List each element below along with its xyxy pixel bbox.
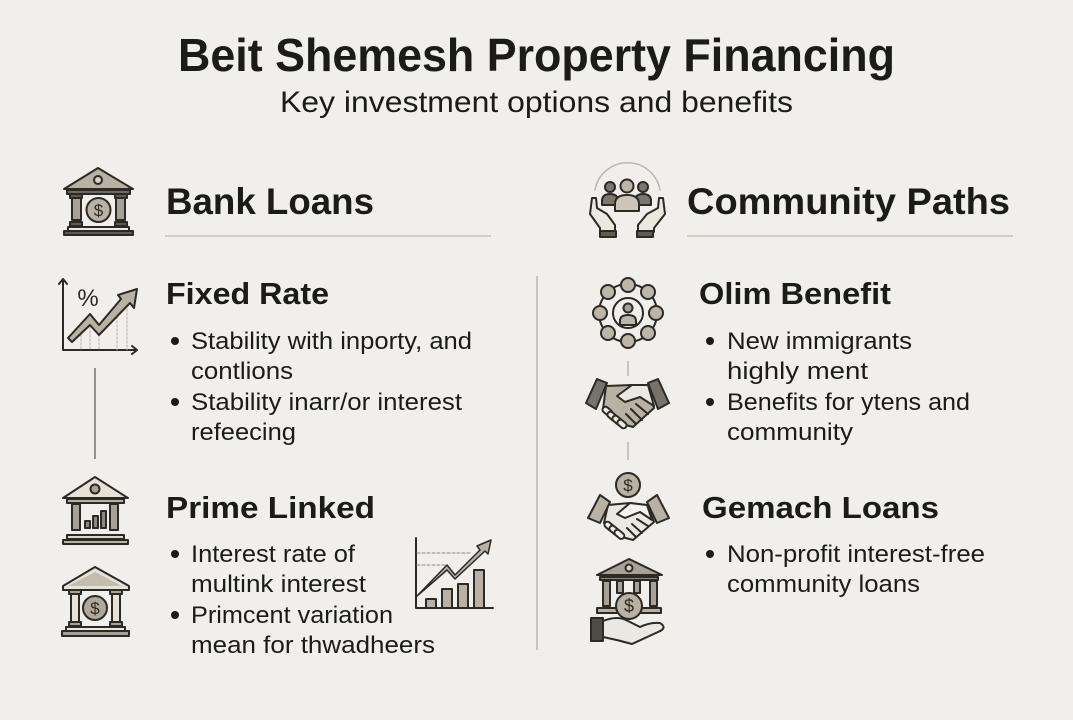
bullet list: Gemach Loans — [706, 541, 985, 598]
icon: bank with dollar coin — [64, 168, 133, 235]
heading: Community Paths: Community Paths — [687, 181, 1010, 222]
section: Prime Linked — [166, 490, 435, 659]
bullet list: Fixed Rate: Stability with inporty, and — [191, 328, 472, 355]
icon: percent growth chart: % — [77, 285, 99, 312]
bullet list: Olim Benefit: New immigrants — [727, 328, 912, 355]
bullet list: Olim Benefit: Benefits for ytens and — [727, 389, 970, 416]
bullet list: Olim Benefit — [706, 328, 970, 446]
bullet list: Prime Linked: Primcent variation — [191, 602, 393, 629]
icon: community hands — [590, 163, 665, 237]
subtitle: Key investment options and benefits — [280, 86, 793, 119]
icon: bank with coin, light — [62, 567, 129, 636]
icon: bank with coin over open hand: $ — [624, 596, 634, 616]
bullet list: Fixed Rate — [171, 328, 472, 446]
icon: percent growth chart — [59, 279, 137, 354]
chart: rising bars with arrow — [416, 538, 493, 608]
bullet list: Olim Benefit: highly ment — [727, 358, 868, 385]
heading: Gemach Loans: Gemach Loans — [702, 490, 939, 525]
title: Beit Shemesh Property Financing — [178, 29, 895, 81]
section: Olim Benefit — [699, 276, 970, 446]
bullet list: Fixed Rate: contlions — [191, 358, 293, 385]
bullet list: Fixed Rate: Stability inarr/or interest — [191, 389, 462, 416]
icon: network circle of people — [593, 278, 663, 348]
section: Gemach Loans — [702, 490, 985, 598]
bullet list: Prime Linked — [171, 541, 435, 659]
bullet list: Olim Benefit: community — [727, 419, 853, 446]
icon: bank with bars — [63, 477, 128, 544]
bullet list: Prime Linked: Interest rate of — [191, 541, 355, 568]
heading: Fixed Rate: Fixed Rate — [166, 276, 329, 311]
icon: handshake with coin — [588, 473, 669, 540]
bullet list: Prime Linked: mean for thwadheers — [191, 632, 435, 659]
icon: handshake — [586, 379, 669, 430]
bullet list: Gemach Loans: Non-profit interest-free — [727, 541, 985, 568]
bullet list: Gemach Loans: community loans — [727, 571, 920, 598]
heading: Prime Linked: Prime Linked — [166, 490, 375, 525]
bullet list: Fixed Rate: refeecing — [191, 419, 296, 446]
icon: bank with coin, light: $ — [90, 599, 100, 618]
heading: Bank Loans: Bank Loans — [166, 181, 374, 222]
bullet list: Prime Linked: multink interest — [191, 571, 366, 598]
heading: Olim Benefit: Olim Benefit — [699, 276, 891, 311]
icon: handshake with coin: $ — [623, 476, 633, 495]
section: Fixed Rate — [166, 276, 472, 446]
icon: bank with coin over open hand — [591, 559, 664, 644]
icon: bank with dollar coin: $ — [94, 201, 104, 220]
